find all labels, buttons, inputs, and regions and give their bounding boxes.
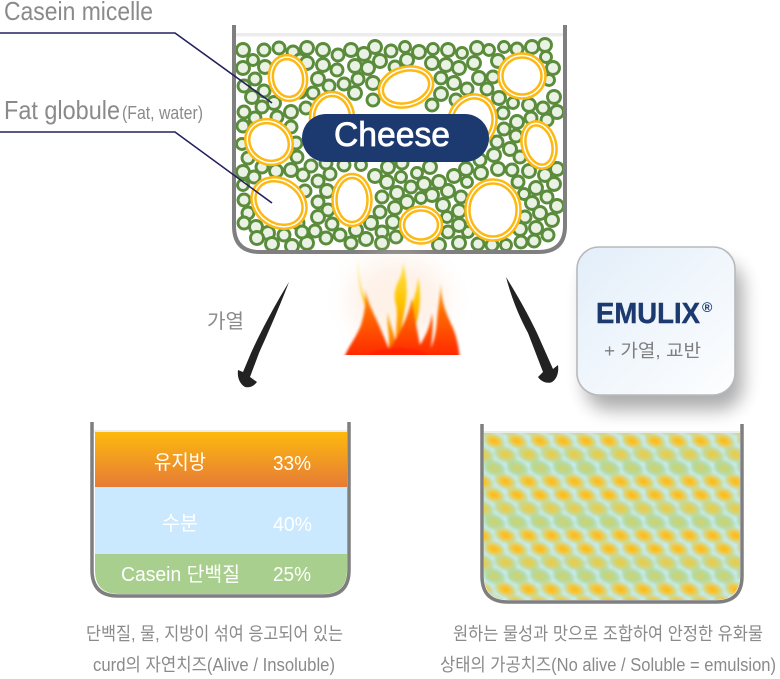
- layer: water: 40%: [273, 514, 312, 536]
- layer: water: [95, 487, 347, 554]
- caption: natural cheese: [86, 624, 343, 675]
- layer: casein: [95, 554, 347, 594]
- pot outline: [234, 25, 565, 252]
- layer: fat: 33%: [273, 453, 311, 475]
- label: fat globule: (Fat, water): [122, 103, 203, 123]
- icon: flame: [343, 256, 460, 364]
- top pot: cheese with micelles and fat globules: [234, 25, 565, 252]
- caption: natural cheese: curd의 자연치즈(Alive / Insoluble): [93, 655, 335, 675]
- layer: fat: [95, 432, 347, 487]
- casein micelles: [236, 38, 564, 252]
- pot: processed cheese emulsion: [480, 424, 744, 604]
- layer: fat: 유지방: [154, 451, 206, 474]
- arrow: right: [506, 277, 558, 383]
- panel: emulix callout: [577, 247, 743, 410]
- cheese label: [302, 114, 489, 162]
- layer: casein: Casein 단백질: [121, 563, 240, 586]
- label: heating: 가열: [207, 310, 244, 333]
- cheese label: Cheese: [334, 116, 450, 154]
- layer: water: 수분: [162, 513, 198, 535]
- layer: casein: 25%: [273, 564, 311, 586]
- label: fat globule: Fat globule: [4, 95, 120, 125]
- panel: emulix callout: + 가열, 교반: [604, 341, 701, 361]
- arrow: left: [238, 282, 289, 387]
- fat globules: [236, 52, 562, 243]
- panel: emulix callout: ®: [702, 299, 713, 315]
- panel: emulix callout: EMULIX: [596, 298, 701, 330]
- pot: natural cheese composition: [92, 422, 349, 596]
- label: casein micelle: [0, 0, 272, 103]
- caption: processed cheese: [440, 624, 776, 675]
- label: fat globule: [0, 95, 272, 203]
- caption: natural cheese: 단백질, 물, 지방이 섞여 응고되어 있는: [86, 624, 343, 644]
